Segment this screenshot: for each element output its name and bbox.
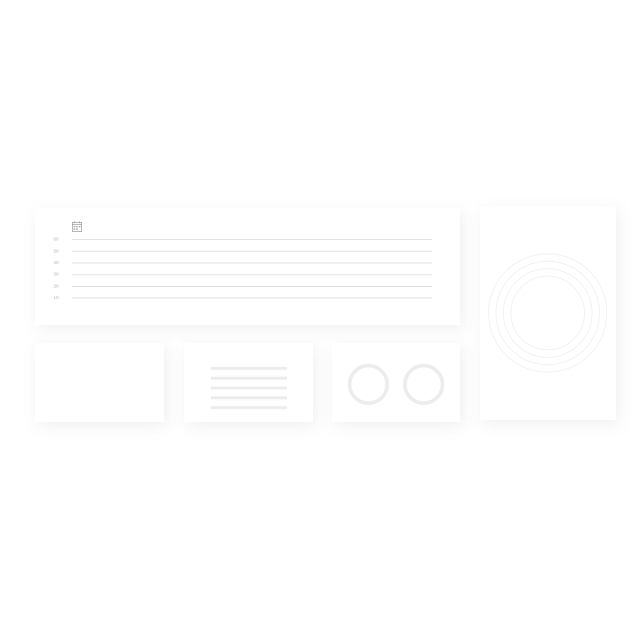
concentric rings: [488, 254, 607, 372]
two rings: [350, 366, 443, 403]
axis labels: 10: [53, 295, 59, 300]
axis labels: 60: [53, 236, 59, 242]
panel: list card: [184, 343, 313, 422]
icon: calendar: [72, 221, 82, 232]
panel: line chart card: [35, 208, 460, 325]
axis labels: 30: [53, 272, 59, 276]
panel: concentric rings card: [480, 206, 616, 420]
axis labels: [53, 236, 59, 300]
list lines: [211, 368, 287, 408]
axis labels: 50: [53, 248, 59, 253]
panel: blank card: [35, 343, 164, 422]
chart grid lines: [72, 240, 432, 298]
panel: two rings card: [332, 343, 460, 422]
axis labels: 20: [53, 284, 59, 288]
axis labels: 40: [53, 260, 59, 265]
